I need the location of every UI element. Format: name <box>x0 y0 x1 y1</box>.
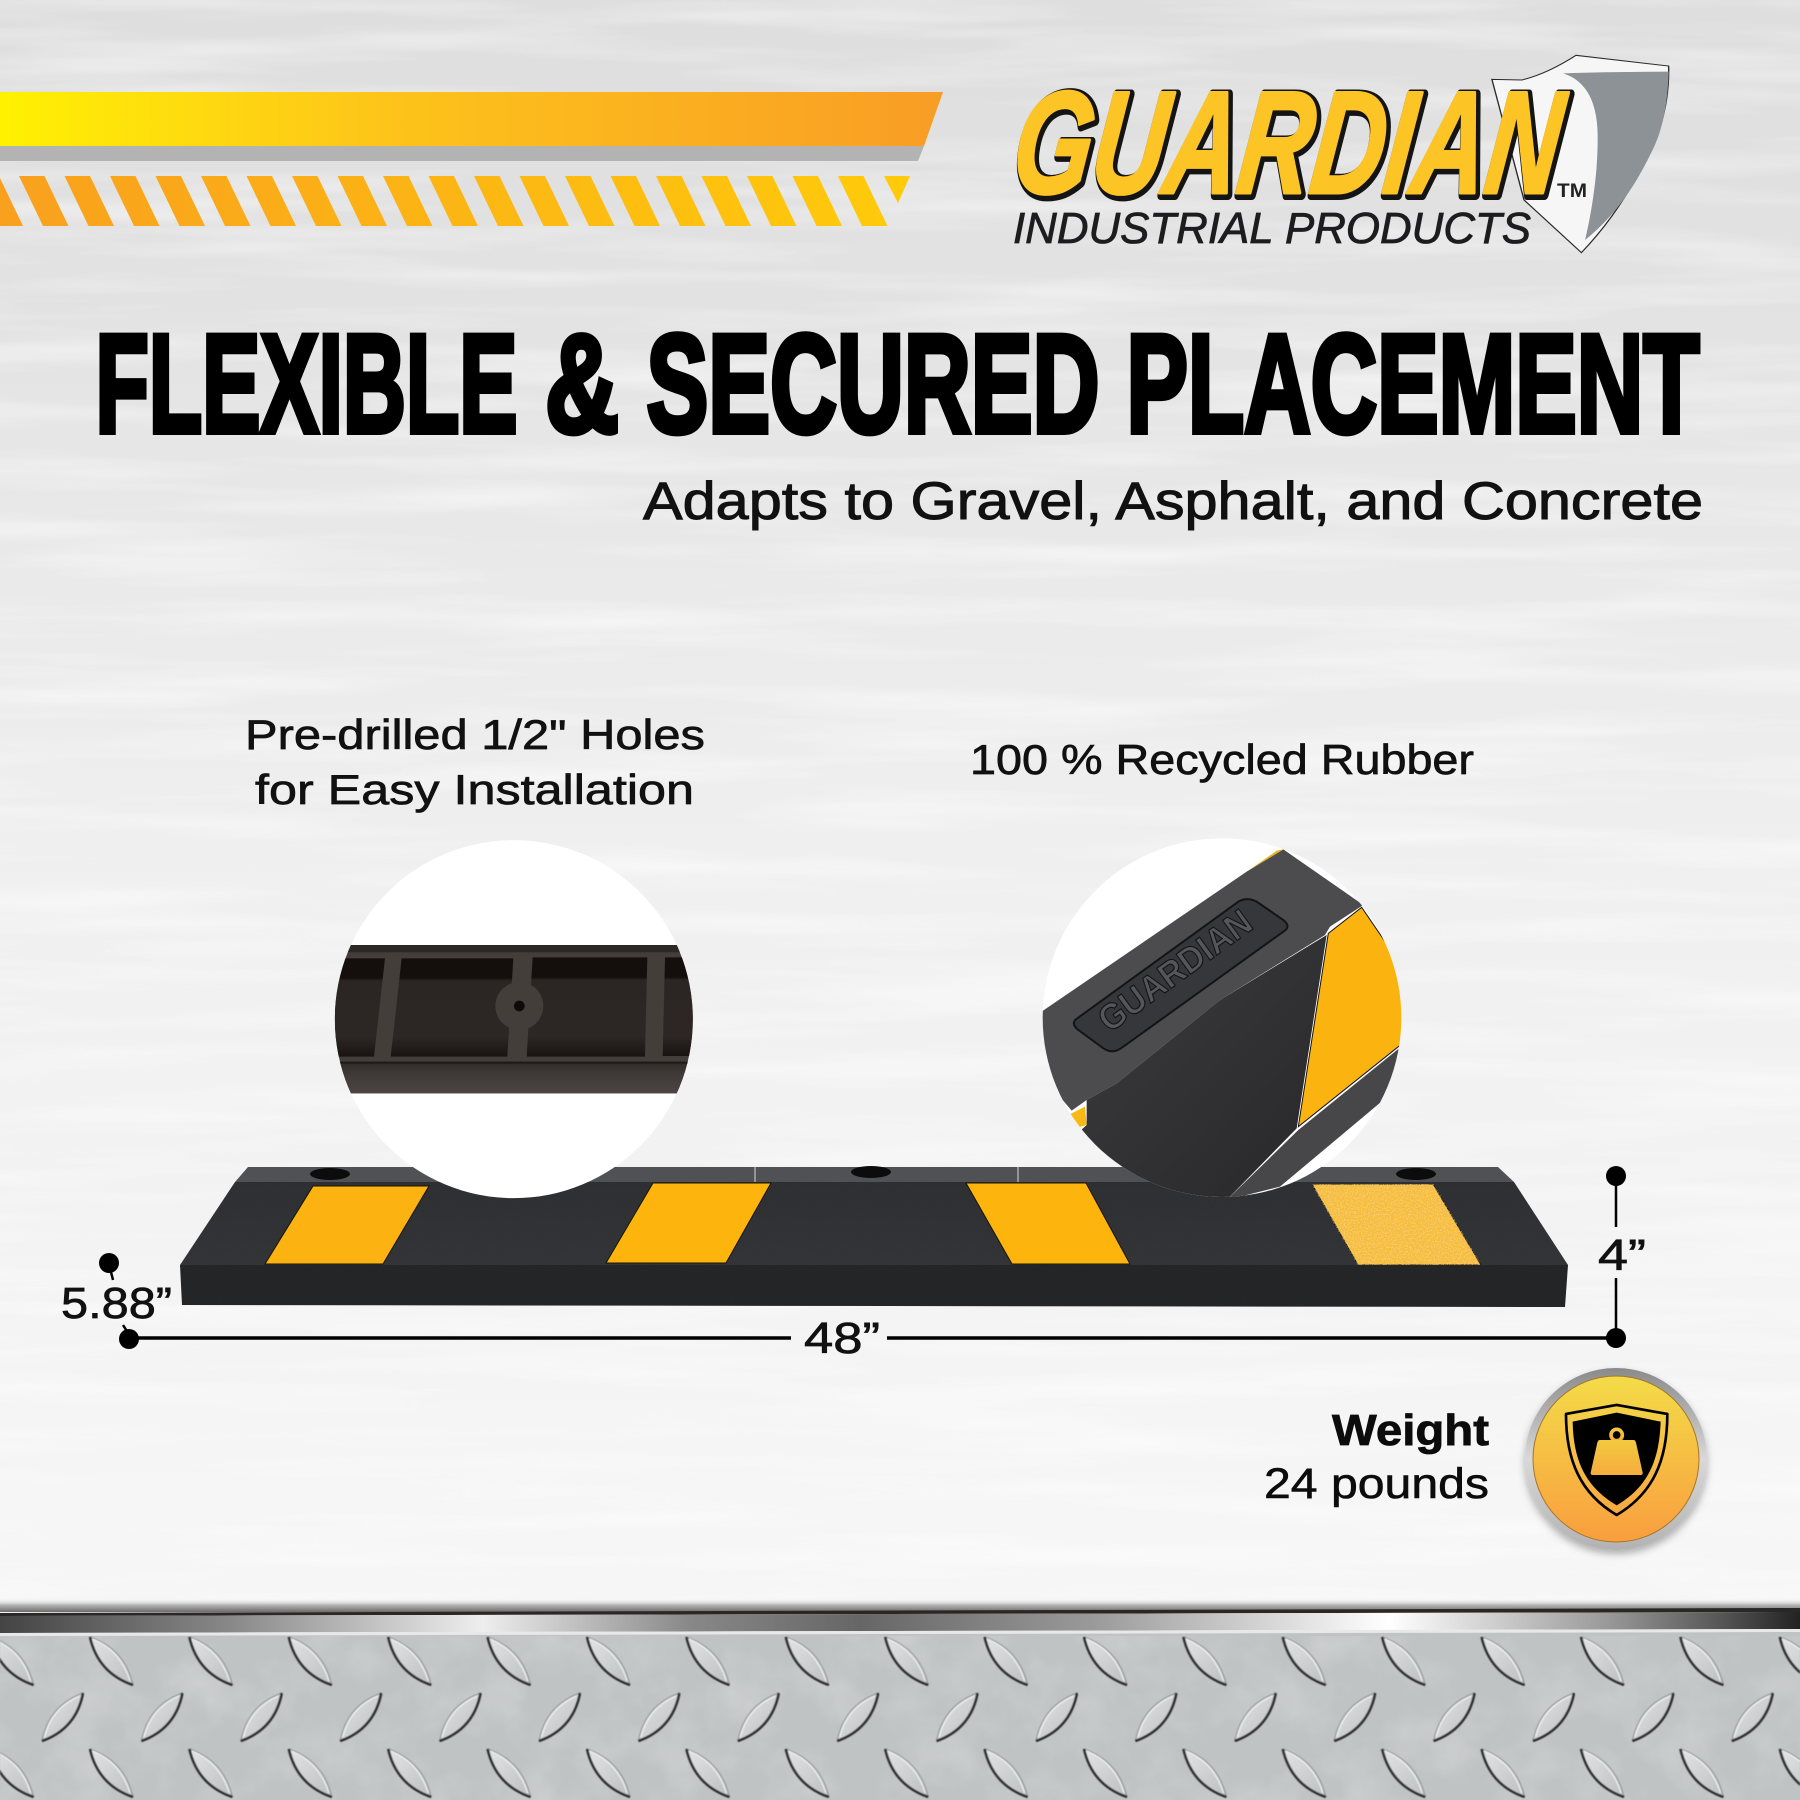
headline: & <box>545 305 619 462</box>
weight text: Weight <box>1332 1406 1489 1455</box>
headline <box>96 305 1700 462</box>
dimension: height 4 inches: 4” <box>1598 1231 1646 1280</box>
logo tagline: INDUSTRIAL PRODUCTS <box>1013 204 1531 253</box>
weight text <box>1264 1406 1489 1508</box>
callout text: pre-drilled holes: for Easy Installation <box>255 766 694 813</box>
hazard stripes <box>0 176 910 226</box>
logo: Guardian Industrial Products <box>1005 55 1669 253</box>
callout text: pre-drilled holes: Pre-drilled 1/2" Holes <box>245 711 705 758</box>
bumper top face <box>235 1167 1514 1182</box>
logo shield <box>1492 55 1669 253</box>
icon: weight badge <box>1525 1368 1707 1550</box>
footer: diamond plate <box>0 1632 1800 1800</box>
dimension: length 48 inches <box>119 1314 1626 1363</box>
mounting holes <box>310 1166 1436 1180</box>
dimension: height 4 inches <box>1598 1166 1646 1338</box>
detail circle: recycled rubber <box>1040 838 1407 1200</box>
subheading: Adapts to Gravel, Asphalt, and Concrete <box>643 472 1703 531</box>
logo trademark: TM <box>1557 181 1587 202</box>
dimension: width 5.88 inches: 5.88” <box>61 1279 172 1328</box>
logo wordmark shadow: GUARDIAN <box>1007 63 1575 227</box>
product: wheel stop bumper <box>180 1166 1568 1307</box>
bumper front face <box>180 1265 1568 1307</box>
lower grey strip <box>1227 1045 1403 1200</box>
top face <box>1040 849 1363 1111</box>
footer: chrome trim <box>0 1598 1800 1636</box>
callout text: pre-drilled holes <box>245 711 705 813</box>
dark side face <box>1070 935 1327 1200</box>
headline: FLEXIBLE <box>96 305 518 462</box>
header bar: yellow and grey band <box>0 92 943 161</box>
dimension: width 5.88 inches <box>61 1253 172 1333</box>
callout text: recycled rubber: 100 % Recycled Rubber <box>970 736 1474 783</box>
detail circle: pre-drilled hole <box>333 840 697 1198</box>
reflective yellow stripes <box>265 1183 1481 1265</box>
embossed plate: GUARDIAN <box>1090 901 1260 1040</box>
weight text: 24 pounds <box>1264 1460 1489 1508</box>
dimension: length 48 inches: 48” <box>804 1314 880 1363</box>
yellow reflective stripe <box>1298 907 1407 1127</box>
logo wordmark: GUARDIAN <box>1005 61 1573 225</box>
bumper sloped face <box>180 1182 1568 1265</box>
headline: SECURED <box>646 305 1100 462</box>
